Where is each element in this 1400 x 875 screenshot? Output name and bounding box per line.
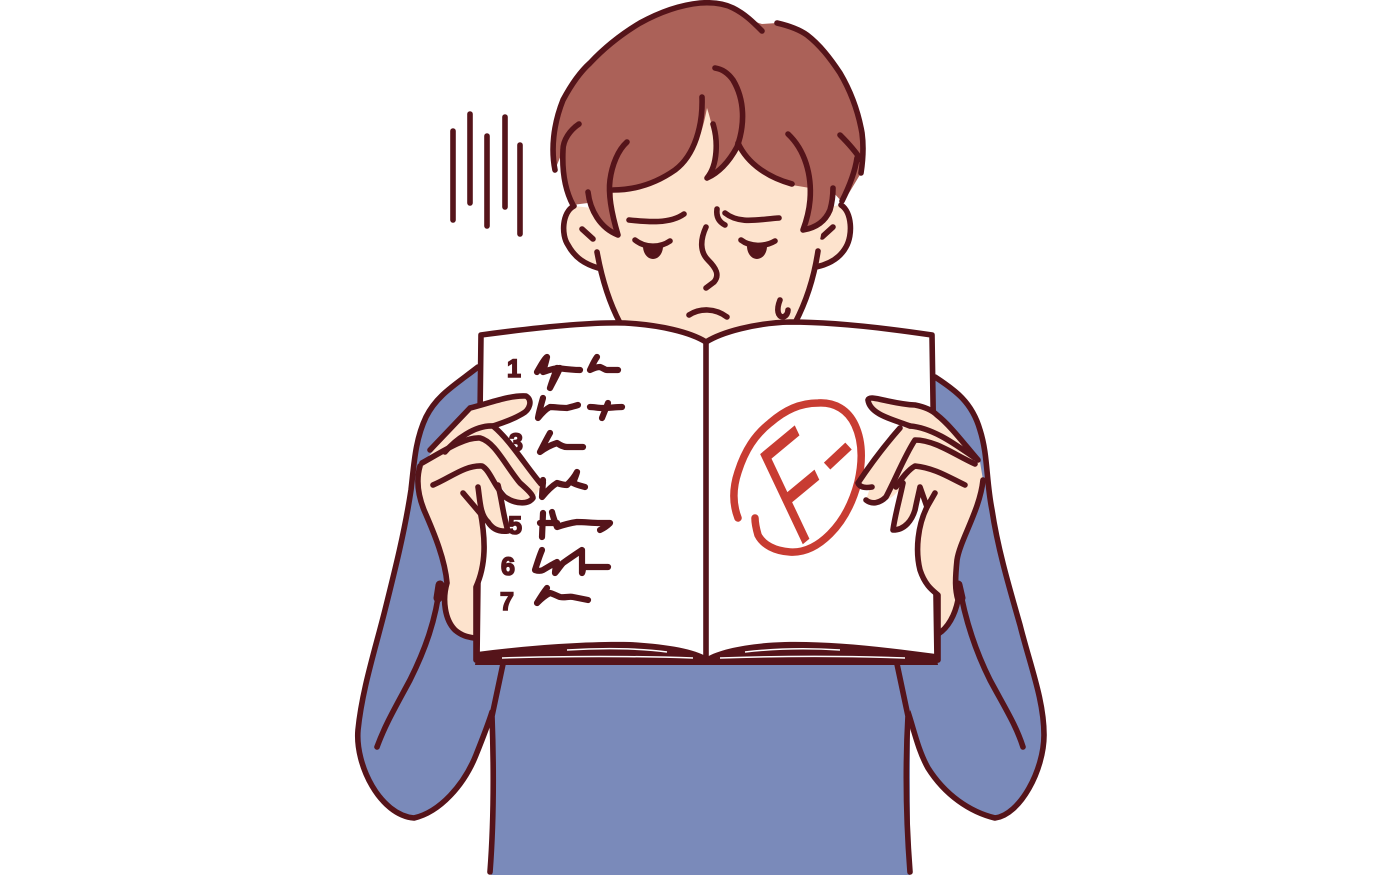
question numbers: 1 [507,355,521,383]
minus sign: - [771,387,892,512]
question numbers [500,355,523,616]
grade letter: F [741,394,854,577]
face [590,100,830,345]
question numbers: 7 [500,588,514,616]
sleeve folds [377,584,1023,747]
book spine [703,342,709,656]
question numbers: 6 [501,553,515,581]
left hand [418,396,541,660]
head [553,3,863,345]
question numbers: 5 [508,512,522,540]
handwritten answers [527,357,622,603]
torso [490,660,910,875]
book pages [477,322,937,660]
right hand [858,397,983,660]
stress lines beside head [453,114,520,234]
red circle [734,403,861,552]
ears [564,205,850,268]
eyes [635,240,775,259]
nose [702,227,717,288]
eyebrows and wrinkle [629,209,779,225]
open test booklet [475,322,938,665]
red circled grade [734,387,892,577]
book bottom edge [475,642,938,665]
mouth [689,310,727,317]
hair [553,3,863,235]
question numbers: 3 [509,429,523,457]
torso and sleeves [358,367,1044,875]
left sleeve [358,367,520,818]
right sleeve [880,377,1044,818]
sweat mark [778,300,788,317]
